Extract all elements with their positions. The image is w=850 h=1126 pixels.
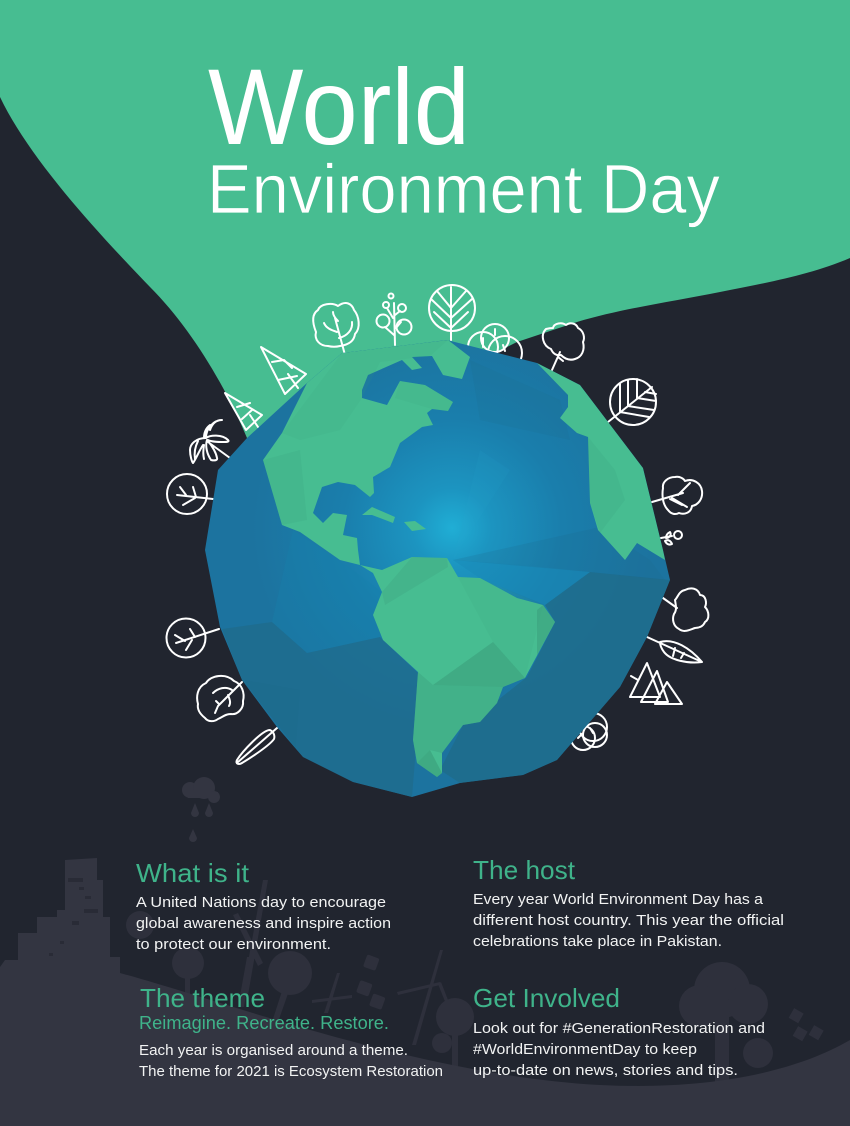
text block: what is it: A United Nations day to encourage xyxy=(136,894,386,911)
text block: the theme: Each year is organised around a theme. xyxy=(139,1042,408,1059)
globe xyxy=(200,335,675,800)
continent: Caribbean islands xyxy=(362,507,426,531)
icon: palm tree xyxy=(190,420,230,463)
text block: the host: The host xyxy=(473,855,576,885)
icon: narrow leaf xyxy=(236,728,277,764)
icon: circle leaf lower xyxy=(166,618,219,658)
ground silhouette xyxy=(0,858,850,1126)
text block: the host: different host country. This year the official xyxy=(473,912,784,929)
text block: the theme xyxy=(139,983,443,1080)
text block: what is it: to protect our environment. xyxy=(136,936,331,953)
icon: cloud tree xyxy=(543,323,584,370)
icon: lower right tree xyxy=(663,588,708,631)
text block: get involved: #WorldEnvironmentDay to keep xyxy=(473,1041,697,1058)
text block: what is it: What is it xyxy=(136,858,250,888)
text block: get involved: Look out for #GenerationRestoration and xyxy=(473,1020,765,1037)
green header shape xyxy=(0,0,850,438)
icon: flower xyxy=(661,531,682,545)
icon: three triangles xyxy=(630,663,682,704)
icon: striped circle tree xyxy=(429,285,475,340)
text block: the host: celebrations take place in Pakistan. xyxy=(473,933,722,950)
icon: leaf xyxy=(647,637,702,663)
continent: South America xyxy=(360,557,555,777)
text block: what is it: global awareness and inspire action xyxy=(136,915,391,932)
text block: get involved: up-to-date on news, stories and tips. xyxy=(473,1062,738,1079)
text block: get involved xyxy=(473,983,765,1079)
continent: North America xyxy=(263,340,470,565)
ocean xyxy=(200,335,675,800)
building windows xyxy=(49,878,98,956)
ocean facets xyxy=(222,542,670,796)
text block: the theme: The theme xyxy=(140,983,265,1013)
icon ring behind globe xyxy=(166,285,708,764)
text block: the host xyxy=(473,855,784,950)
icon: bushy tree xyxy=(197,676,244,721)
icon: trees behind globe xyxy=(468,324,522,370)
land facets xyxy=(382,557,555,777)
icon: right tree xyxy=(652,477,702,514)
icon: rain cloud xyxy=(182,777,220,842)
text block: the theme: Reimagine. Recreate. Restore. xyxy=(139,1013,389,1033)
continent: Africa and Europe xyxy=(537,363,665,560)
icon: large triangle tree xyxy=(261,347,306,394)
text block: get involved: Get Involved xyxy=(473,983,620,1013)
title xyxy=(207,46,720,228)
text block: the host: Every year World Environment Day has a xyxy=(473,891,764,908)
icon: sprig xyxy=(376,294,412,345)
icon: circle leaf left xyxy=(167,474,213,514)
icon: trees behind globe lower xyxy=(571,713,607,750)
title: World: World xyxy=(208,46,470,167)
silhouette: trees and turbines xyxy=(126,880,824,1085)
icon: small triangle tree xyxy=(225,393,262,430)
icon: round-crown tree xyxy=(313,303,359,355)
text block: what is it xyxy=(136,858,391,953)
title: Environment Day: Environment Day xyxy=(207,150,720,228)
text block: the theme: The theme for 2021 is Ecosystem Restoration xyxy=(139,1063,443,1080)
icon: striped leaf circle xyxy=(608,379,656,425)
